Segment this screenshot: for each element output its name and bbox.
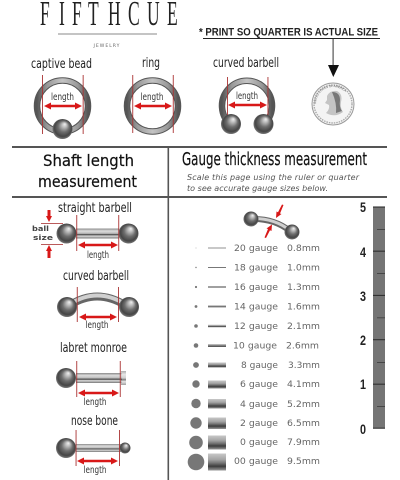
gauge row: 16: 16 gauge (234, 283, 278, 293)
gauge row: 4: 5.2mm (287, 400, 320, 410)
gauge row: 8 (193, 361, 320, 371)
gauge row: 00: 9.5mm (287, 457, 320, 467)
diagram: nose bone: length (84, 465, 106, 476)
gauge row: 14: 14 gauge (234, 302, 278, 312)
gauge row: 10: 2.6mm (286, 342, 319, 352)
gauge row: 12: 12 gauge (234, 322, 278, 332)
icon: quarter coin: UNITED STATES OF AMERICA (314, 85, 346, 104)
diagram: captive bead ring (37, 75, 88, 139)
gauge row: 20 (196, 244, 320, 254)
gauge row: 14 (195, 302, 320, 312)
gauge row: 20: 0.8mm (287, 244, 320, 254)
gauge row: 6: 6 gauge (240, 380, 278, 390)
gauge row: 20: 20 gauge (234, 244, 278, 254)
gauge row: 4 (191, 399, 320, 410)
diagram: ring (127, 75, 178, 133)
logo: FIFTHCUE JEWELRY (40, 0, 178, 49)
diagram: curved barbell: curved barbell (63, 269, 129, 284)
ruler: 2 (360, 332, 366, 348)
heading: shaft length measurement (38, 151, 137, 191)
gauge row: 6: 4.1mm (287, 380, 320, 390)
gauge row: 10 (194, 342, 319, 352)
gauge row: 2 (190, 417, 320, 429)
ruler: 4 (360, 244, 366, 260)
diagram: straight barbell: straight barbell (58, 201, 132, 216)
gauge row: 4: 4 gauge (240, 400, 278, 410)
print instruction: * PRINT SO QUARTER IS ACTUAL SIZE (199, 26, 378, 38)
heading: shaft length measurement: Shaft length (43, 151, 134, 170)
gauge row: 12: 2.1mm (287, 322, 320, 332)
diagram: curved barbell horseshoe (221, 77, 274, 134)
logo: FIFTHCUE JEWELRY: JEWELRY (93, 43, 120, 49)
diagram: nose bone: nose bone (71, 414, 118, 429)
diagram: labret monroe (56, 341, 127, 408)
gauge row: 18: 18 gauge (234, 264, 278, 274)
gauge row: 2: 6.5mm (287, 419, 320, 429)
gauge row: 14: 1.6mm (287, 302, 320, 312)
gauge row: 8: 3.3mm (288, 361, 320, 371)
diagram: straight barbell (32, 201, 138, 261)
note: scale instructions: to see accurate gauge sizes below. (187, 184, 328, 193)
gauge row: 0 (189, 436, 320, 450)
diagram: straight barbell: length (87, 250, 109, 261)
gauge row: 16: 1.3mm (287, 283, 320, 293)
label: ring: ring (142, 56, 160, 71)
diagram: gauge barbell (244, 204, 300, 240)
diagram: curved barbell horseshoe: length (236, 91, 258, 102)
label: curved barbell top: curved barbell (213, 56, 279, 71)
diagram: captive bead ring: length (51, 92, 74, 103)
note: scale instructions (187, 173, 360, 193)
table rules (12, 146, 387, 480)
gauge row: 12 (194, 322, 320, 332)
gauge row: 0: 7.9mm (287, 438, 320, 448)
diagram: straight barbell: ball (32, 225, 49, 233)
icon: quarter coin (312, 82, 354, 126)
gauge row: 6 (192, 380, 320, 390)
diagram: straight barbell: size (33, 234, 53, 242)
diagram: curved barbell: length (86, 320, 108, 331)
label: captive bead: captive bead (31, 57, 92, 72)
gauge row: 2: 2 gauge (240, 419, 278, 429)
diagram: ring: length (140, 92, 164, 103)
diagram: curved barbell (57, 269, 139, 331)
arrow: to quarter (328, 39, 339, 77)
gauge row: 00: 00 gauge (234, 457, 278, 467)
heading: shaft length measurement: measurement (38, 172, 137, 191)
ruler: 3 (360, 288, 366, 304)
ruler: 1 (360, 376, 366, 392)
diagram: labret monroe: length (84, 397, 106, 408)
gauge row: 00 (188, 454, 320, 470)
diagram: nose bone (56, 414, 130, 476)
ruler (360, 199, 385, 437)
note: scale instructions: Scale this page using the ruler or quarter (187, 173, 360, 182)
gauge row: 16 (195, 283, 320, 293)
ruler: 0 (360, 421, 366, 437)
gauge row: 18: 1.0mm (287, 264, 320, 274)
ruler: 5 (360, 199, 366, 215)
gauge row: 18 (195, 264, 320, 274)
gauge row: 8: 8 gauge (241, 361, 278, 371)
diagram: labret monroe: labret monroe (60, 341, 127, 356)
gauge row: 0: 0 gauge (240, 438, 278, 448)
gauge row: 10: 10 gauge (233, 342, 277, 352)
